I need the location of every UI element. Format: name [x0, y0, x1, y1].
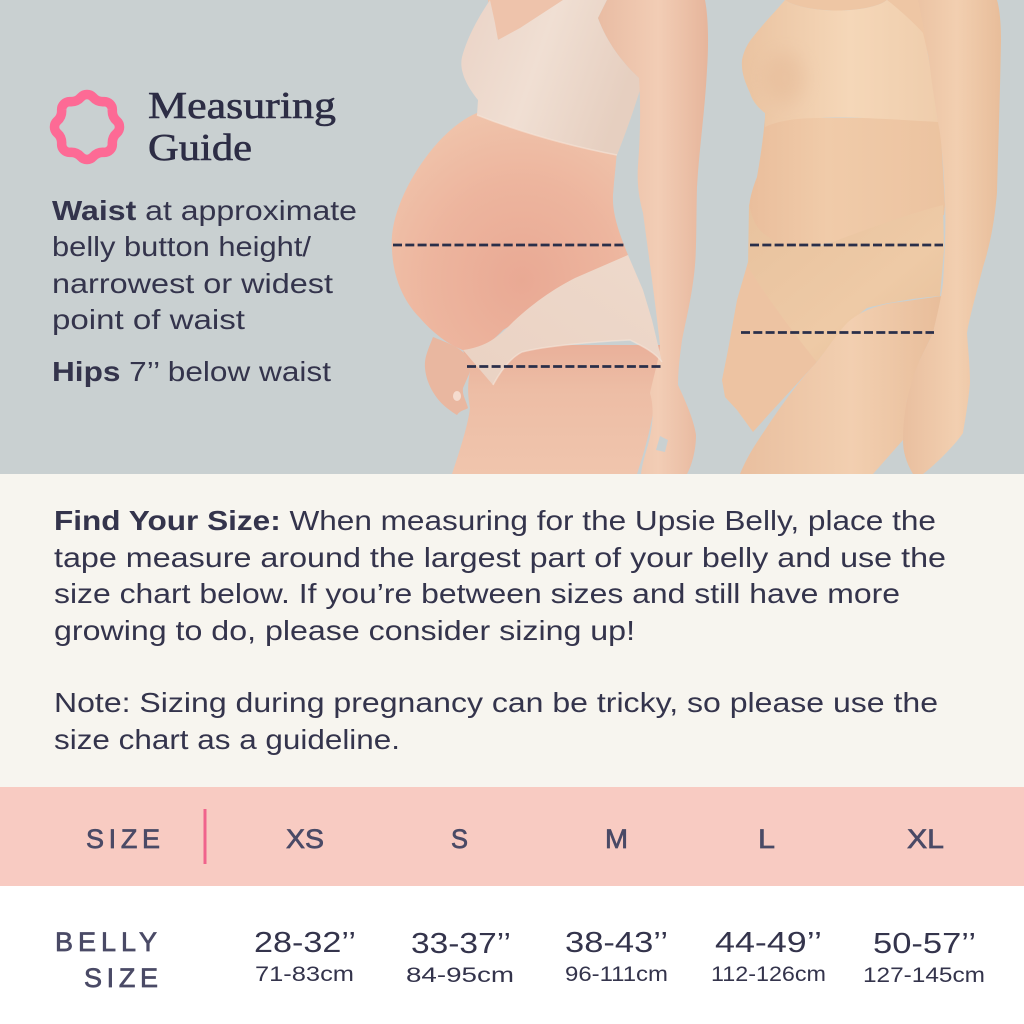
table header row: S: [451, 824, 468, 854]
text block: waist instructions: belly button height/: [52, 231, 311, 262]
neckline and shoulder skin: [785, 0, 932, 70]
inch measurements: [254, 927, 976, 960]
table header row: XS: [286, 824, 324, 854]
bra scalloped hem: [477, 115, 617, 155]
table header row: [86, 824, 944, 854]
inch measurements: 33-37’’: [411, 928, 511, 960]
rear leg and thigh: [452, 345, 662, 474]
table row label: belly size: SIZE: [84, 963, 158, 993]
figure: pregnant model side view: [392, 0, 708, 474]
arm and hand rear: [598, 0, 708, 474]
text block: sizing note: [54, 687, 938, 755]
text block: waist instructions: Waist at approximate: [52, 195, 357, 226]
neck and chest skin: [488, 0, 566, 42]
title: Guide: [148, 127, 252, 169]
title: [148, 85, 336, 169]
text block: find your size: Find Your Size: When measuring for the Upsie Belly, place the: [54, 505, 936, 536]
title: Measuring: [148, 85, 336, 127]
inch measurements: 44-49’’: [715, 927, 822, 959]
bra: [461, 0, 640, 155]
bra: [742, 0, 938, 127]
belly: [392, 100, 628, 351]
front hand: [425, 337, 470, 415]
table header row: XL: [907, 824, 944, 854]
centimetre measurements: 84-95cm: [406, 963, 514, 987]
text block: waist instructions: [52, 195, 357, 335]
table row label: belly size: BELLY: [55, 927, 157, 957]
underwear scalloped hem: [493, 340, 662, 385]
text block: find your size: tape measure around the largest part of your belly and use the: [54, 542, 946, 573]
front leg: [740, 296, 942, 474]
table header row: SIZE: [86, 824, 160, 854]
table header row: L: [758, 824, 775, 854]
centimetre measurements: [255, 962, 985, 987]
centimetre measurements: 112-126cm: [711, 962, 826, 986]
arm and hand: [903, 0, 1001, 474]
panel: measuring guide background: [0, 0, 1024, 474]
centimetre measurements: 127-145cm: [863, 963, 985, 987]
table header band: [0, 787, 1024, 886]
centimetre measurements: 96-111cm: [565, 962, 668, 986]
table row label: belly size: [55, 927, 158, 993]
text block: waist instructions: narrowest or widest: [52, 268, 333, 299]
header divider: [204, 809, 206, 864]
bra under-bust shading: [765, 52, 805, 104]
figure: non-pregnant model side view: [722, 0, 1001, 474]
measuring lines: waist and hips: [393, 245, 943, 366]
table header row: M: [605, 824, 628, 854]
text block: hips instructions: Hips 7’’ below waist: [52, 356, 331, 387]
gap between fingers: [656, 436, 668, 452]
text block: find your size: growing to do, please consider sizing up!: [54, 615, 635, 646]
text block: find your size: size chart below. If you’re between sizes and still have more: [54, 578, 900, 609]
icon: pink scalloped flower outline: [54, 94, 120, 160]
inch measurements: 38-43’’: [565, 927, 668, 959]
inch measurements: 28-32’’: [254, 927, 356, 959]
rear hip and hand: [722, 262, 817, 432]
underwear: [748, 203, 944, 362]
text block: sizing note: Note: Sizing during pregnancy can be tricky, so please use the: [54, 687, 938, 718]
underwear: [463, 255, 662, 385]
torso skin: [749, 118, 945, 250]
panel: find your size: [0, 474, 1024, 787]
text block: sizing note: size chart as a guideline.: [54, 724, 400, 755]
text block: waist instructions: point of waist: [52, 304, 245, 335]
text block: find your size: [54, 505, 946, 646]
centimetre measurements: 71-83cm: [255, 962, 354, 986]
fingernail: [453, 391, 461, 401]
inch measurements: 50-57’’: [873, 928, 976, 960]
